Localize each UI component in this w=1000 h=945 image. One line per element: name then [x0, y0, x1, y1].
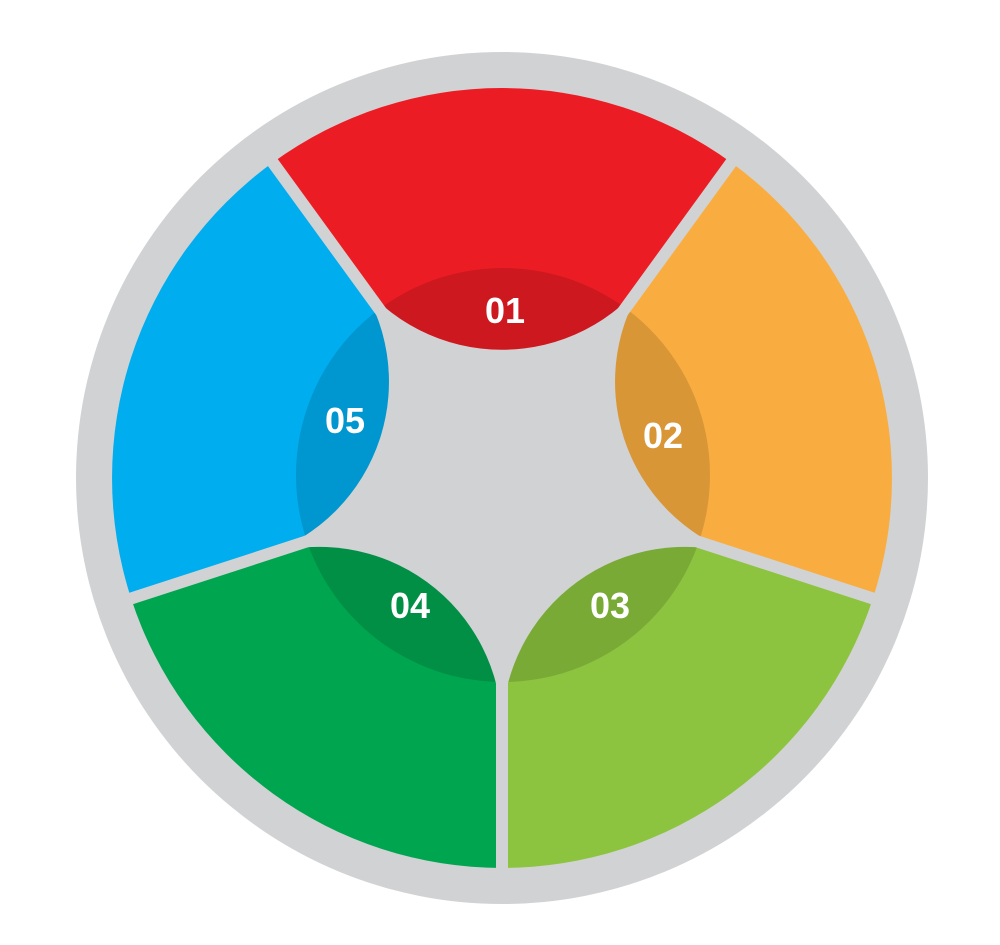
- label 03: 03: [590, 585, 630, 626]
- segment 03 light green: [392, 447, 917, 928]
- label 01: 01: [485, 290, 525, 331]
- segment 02 orange: [553, 140, 944, 656]
- gray ring background: [76, 52, 928, 904]
- label 05: 05: [325, 400, 365, 441]
- segment 01 red: [273, 88, 731, 350]
- inner dark overlay circle: [296, 268, 710, 682]
- label 04: 04: [390, 585, 430, 626]
- label 02: 02: [643, 415, 683, 456]
- segment 04 green: [87, 447, 612, 928]
- segment 05 blue: [60, 140, 451, 656]
